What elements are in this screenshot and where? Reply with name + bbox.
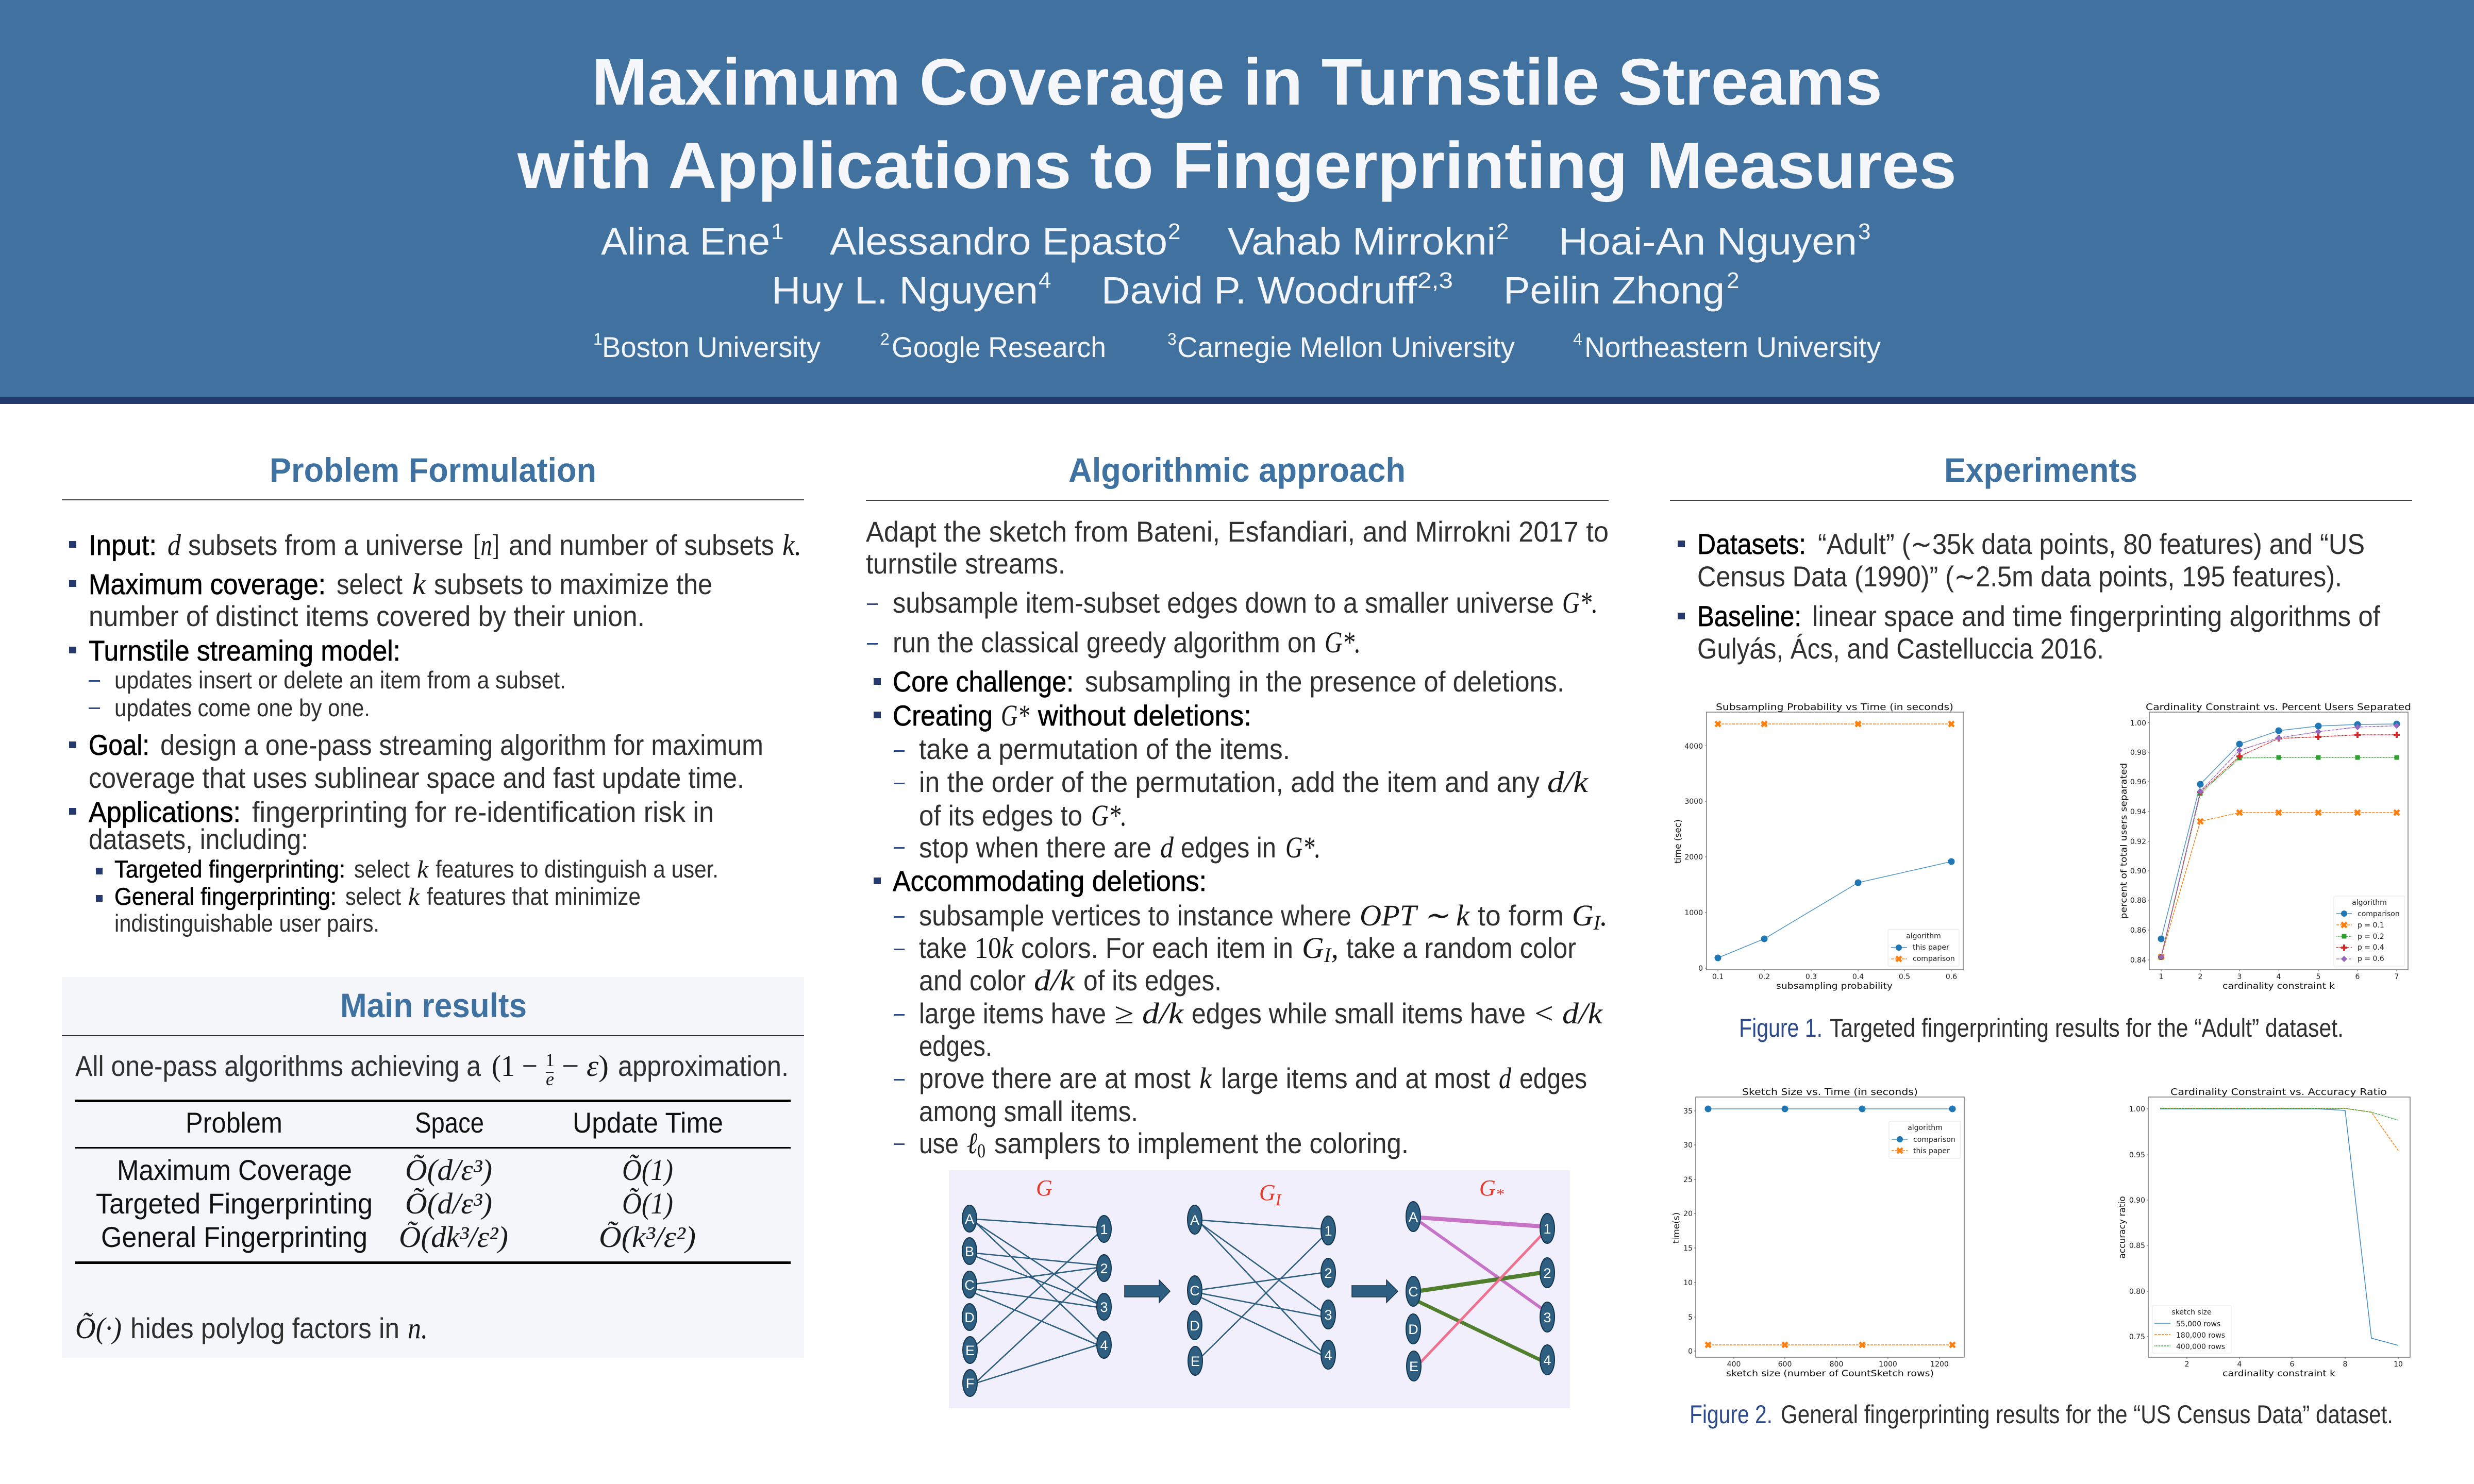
item: accommodating deletions: among small items. bbox=[919, 1095, 1138, 1127]
chart: sketch size vs time: 35 bbox=[1683, 1107, 1693, 1116]
intro text: turnstile streams. bbox=[866, 547, 1065, 580]
item: datasets: “Adult” (∼35k data points, 80 features) and “US bbox=[1818, 528, 2365, 560]
chart: cardinality constraint vs percent users separated: 0.96 bbox=[2130, 778, 2146, 786]
heading: algorithmic approach: Algorithmic approach bbox=[1068, 451, 1406, 489]
chart: sketch size vs time: 1000 bbox=[1879, 1360, 1897, 1369]
results table: Õ(k³/ε²) bbox=[599, 1220, 696, 1254]
graph G: G bbox=[1036, 1175, 1052, 1201]
chart: cardinality constraint vs percent users separated: percent of total users separated bbox=[2119, 763, 2129, 919]
chart: cardinality constraint vs accuracy ratio: 0.75 bbox=[2129, 1333, 2145, 1341]
panel: problem formulation bbox=[62, 451, 804, 937]
item: accommodating deletions: G bbox=[1302, 931, 1324, 965]
authors bbox=[601, 219, 1870, 312]
chart: sketch size vs time: 10 bbox=[1683, 1279, 1693, 1287]
panel: main results bbox=[62, 977, 804, 1358]
graph G: 1 bbox=[1100, 1222, 1108, 1237]
legend bbox=[2152, 1306, 2231, 1353]
legend: p = 0.6 bbox=[2358, 955, 2384, 963]
chart: sketch size vs time: 0 bbox=[1688, 1347, 1693, 1356]
chart: sketch size vs time: 600 bbox=[1778, 1360, 1792, 1369]
item: applications: select bbox=[345, 883, 401, 910]
header banner bbox=[0, 0, 2474, 404]
chart: cardinality constraint vs percent users separated: 0.94 bbox=[2130, 808, 2146, 816]
panel: algorithmic approach bbox=[866, 451, 1609, 1408]
graph G_I: D bbox=[1190, 1318, 1200, 1334]
item: accommodating deletions: to form bbox=[1478, 899, 1564, 932]
results table: General Fingerprinting bbox=[101, 1221, 367, 1253]
authors: 4 bbox=[1039, 268, 1051, 293]
approximation statement: All one-pass algorithms achieving a bbox=[75, 1050, 481, 1082]
item: accommodating deletions: subsample vertices to instance where bbox=[919, 899, 1351, 932]
graph G bbox=[962, 1175, 1111, 1396]
item: baseline: Gulyás, Ács, and Castelluccia 2016. bbox=[1697, 632, 2104, 665]
chart: subsampling probability vs time: 4000 bbox=[1684, 743, 1703, 751]
chart: cardinality constraint vs percent users separated: 0.88 bbox=[2130, 897, 2146, 905]
affiliations: 1 bbox=[593, 330, 603, 348]
item: applications: features to distinguish a user. bbox=[436, 855, 718, 883]
item: baseline: linear space and time fingerprinting algorithms of bbox=[1812, 600, 2380, 632]
item: applications: indistinguishable user pairs. bbox=[114, 909, 379, 937]
chart: cardinality constraint vs accuracy ratio: 0.85 bbox=[2129, 1242, 2145, 1250]
arrow: G_I to G* bbox=[1352, 1280, 1398, 1303]
results table: Update Time bbox=[573, 1106, 723, 1139]
item: core challenge bbox=[874, 665, 1564, 698]
item: core challenge: Core challenge: bbox=[893, 665, 1074, 698]
caption: figure 2: Figure 2. bbox=[1690, 1400, 1773, 1429]
affiliations: 2 bbox=[880, 330, 890, 348]
chart: sketch size vs time: 25 bbox=[1683, 1176, 1693, 1184]
approximation statement: e bbox=[546, 1069, 554, 1089]
graph G*: 3 bbox=[1543, 1310, 1551, 1325]
graph G_I: A bbox=[1190, 1212, 1199, 1228]
graph G: C bbox=[964, 1277, 975, 1293]
chart: subsampling probability vs time: 0 bbox=[1698, 965, 1703, 973]
item: applications: k bbox=[408, 883, 421, 910]
graph G_I: C bbox=[1190, 1283, 1200, 1298]
chart: subsampling probability vs time: 2000 bbox=[1684, 853, 1703, 862]
chart: sketch size vs time: 5 bbox=[1688, 1313, 1693, 1322]
legend: p = 0.4 bbox=[2358, 943, 2384, 952]
chart: cardinality constraint vs percent users separated: 0.84 bbox=[2130, 956, 2146, 965]
authors: 2 bbox=[1727, 268, 1739, 293]
item: datasets: Datasets: bbox=[1697, 528, 1806, 560]
item: maximum coverage: subsets to maximize the bbox=[434, 568, 712, 600]
item: applications: Targeted fingerprinting: bbox=[114, 855, 345, 883]
item: turnstile streaming model: updates come one by one. bbox=[114, 694, 370, 721]
intro steps: G*. bbox=[1325, 626, 1361, 659]
chart: cardinality constraint vs percent users separated: 1.00 bbox=[2130, 719, 2146, 728]
item: accommodating deletions: Accommodating deletions: bbox=[893, 865, 1207, 897]
authors: 2 bbox=[1168, 219, 1180, 244]
item: goal: Goal: bbox=[89, 729, 149, 761]
legend: comparison bbox=[1913, 955, 1955, 963]
item: input bbox=[69, 528, 801, 562]
graph G*: 1 bbox=[1543, 1221, 1551, 1237]
table footnote: Õ(·) bbox=[75, 1311, 122, 1345]
item: applications: fingerprinting for re-identification risk in bbox=[252, 796, 714, 828]
chart: sketch size vs time: 15 bbox=[1683, 1244, 1693, 1253]
item: accommodating deletions: prove there are at most bbox=[919, 1062, 1191, 1094]
item: core challenge: subsampling in the presence of deletions. bbox=[1085, 665, 1564, 698]
item: input: Input: bbox=[89, 529, 157, 561]
legend: algorithm bbox=[2352, 899, 2387, 907]
item: datasets: Census Data (1990)” (∼2.5m data points, 195 features). bbox=[1697, 560, 2342, 593]
caption: figure 1: Figure 1. bbox=[1739, 1014, 1823, 1042]
chart: cardinality constraint vs accuracy ratio: Cardinality Constraint vs. Accuracy Ratio bbox=[2170, 1087, 2387, 1098]
chart: cardinality constraint vs percent users separated: 0.92 bbox=[2130, 838, 2146, 846]
diagram: bipartite graph sketching bbox=[949, 1170, 1570, 1408]
item: maximum coverage bbox=[69, 567, 712, 632]
graph G: B bbox=[965, 1244, 974, 1259]
graph G: E bbox=[965, 1343, 975, 1358]
heading: experiments: Experiments bbox=[1944, 451, 2137, 489]
authors: David P. Woodruff bbox=[1101, 269, 1417, 312]
chart: subsampling probability vs time: 0.3 bbox=[1806, 973, 1817, 981]
chart: sketch size vs time: 400 bbox=[1727, 1360, 1741, 1369]
item: maximum coverage: number of distinct items covered by their union. bbox=[89, 600, 645, 632]
results table: Õ(d/ε³) bbox=[405, 1153, 492, 1187]
graph G*: C bbox=[1408, 1284, 1418, 1300]
item: creating G* without deletions: stop when there are bbox=[919, 831, 1151, 864]
chart: cardinality constraint vs accuracy ratio: 0.80 bbox=[2129, 1288, 2145, 1296]
chart: subsampling probability vs time: 0.4 bbox=[1852, 973, 1864, 981]
chart: cardinality constraint vs accuracy ratio: 1.00 bbox=[2129, 1105, 2145, 1114]
chart: sketch size vs time: 20 bbox=[1683, 1210, 1693, 1218]
chart: cardinality constraint vs accuracy ratio: 10 bbox=[2394, 1360, 2403, 1369]
graph G: 3 bbox=[1100, 1300, 1108, 1315]
chart: sketch size vs time: 1200 bbox=[1930, 1360, 1949, 1369]
item: accommodating deletions bbox=[874, 865, 1608, 1162]
legend: 180,000 rows bbox=[2176, 1331, 2225, 1340]
item: accommodating deletions: use bbox=[919, 1127, 959, 1159]
item: creating G* without deletions bbox=[874, 699, 1589, 864]
chart: subsampling probability vs time bbox=[1673, 702, 1963, 991]
graph G*: A bbox=[1409, 1209, 1418, 1225]
approximation statement bbox=[75, 1049, 789, 1089]
chart: cardinality constraint vs accuracy ratio bbox=[2117, 1087, 2410, 1379]
item: accommodating deletions: large items have bbox=[919, 997, 1106, 1030]
item: maximum coverage: select bbox=[337, 568, 403, 600]
item: input: d bbox=[168, 528, 181, 562]
item: datasets bbox=[1678, 528, 2365, 593]
graph G_I: G bbox=[1259, 1180, 1276, 1205]
item: applications: Applications: bbox=[89, 796, 241, 828]
item: accommodating deletions: d bbox=[1499, 1061, 1512, 1095]
legend bbox=[1889, 1121, 1961, 1158]
approximation statement: 1 bbox=[545, 1050, 555, 1070]
graph G_I: 2 bbox=[1324, 1266, 1332, 1281]
item: accommodating deletions: ≥ bbox=[1114, 997, 1134, 1030]
item: creating G* without deletions: edges in bbox=[1181, 831, 1276, 864]
authors: 1 bbox=[771, 219, 783, 244]
chart: cardinality constraint vs percent users separated: 5 bbox=[2316, 973, 2320, 981]
item: creating G* without deletions: without deletions: bbox=[1038, 699, 1251, 732]
chart: cardinality constraint vs percent users separated: 1 bbox=[2159, 973, 2163, 981]
item: turnstile streaming model: updates insert or delete an item from a subset. bbox=[114, 666, 566, 694]
chart: cardinality constraint vs accuracy ratio: cardinality constraint k bbox=[2222, 1369, 2335, 1379]
chart: subsampling probability vs time: time (sec) bbox=[1673, 819, 1683, 864]
chart: subsampling probability vs time: 3000 bbox=[1684, 798, 1703, 806]
item: applications: k bbox=[417, 856, 429, 883]
graph G*: E bbox=[1409, 1359, 1418, 1374]
intro steps: subsample item-subset edges down to a smaller universe bbox=[893, 586, 1554, 619]
authors: Hoai-An Nguyen bbox=[1559, 220, 1857, 263]
chart: cardinality constraint vs percent users separated: 0.90 bbox=[2130, 867, 2146, 875]
item: turnstile streaming model bbox=[69, 634, 566, 721]
item: accommodating deletions: colors. For each item in bbox=[1021, 932, 1293, 964]
item: input: [n] bbox=[473, 528, 499, 562]
graph G: D bbox=[964, 1310, 975, 1325]
chart: cardinality constraint vs percent users separated: cardinality constraint k bbox=[2222, 981, 2335, 991]
item: goal: coverage that uses sublinear space and fast update time. bbox=[89, 762, 744, 794]
heading: main results: Main results bbox=[340, 986, 527, 1024]
chart: cardinality constraint vs accuracy ratio: 0.90 bbox=[2129, 1196, 2145, 1205]
results table bbox=[75, 1100, 791, 1264]
graph G: 4 bbox=[1100, 1338, 1108, 1353]
item: turnstile streaming model: Turnstile streaming model: bbox=[89, 634, 400, 667]
chart: sketch size vs time: sketch size (number of CountSketch rows) bbox=[1726, 1369, 1934, 1379]
item: accommodating deletions: I bbox=[1593, 911, 1601, 934]
item: accommodating deletions: < bbox=[1534, 997, 1553, 1030]
authors: Vahab Mirrokni bbox=[1228, 220, 1496, 263]
affiliations: Northeastern University bbox=[1584, 331, 1881, 363]
item: accommodating deletions: 10k bbox=[975, 931, 1014, 965]
item: accommodating deletions: edges bbox=[1519, 1062, 1587, 1094]
item: accommodating deletions: and color bbox=[919, 964, 1026, 997]
item: accommodating deletions: d/k bbox=[1034, 964, 1075, 997]
chart: cardinality constraint vs percent users separated: 3 bbox=[2237, 973, 2242, 981]
affiliations: Boston University bbox=[602, 331, 821, 363]
affiliations bbox=[593, 330, 1881, 363]
chart: subsampling probability vs time: Subsampling Probability vs Time (in seconds) bbox=[1716, 702, 1953, 713]
chart: sketch size vs time: time(s) bbox=[1671, 1212, 1682, 1243]
authors: Huy L. Nguyen bbox=[772, 269, 1038, 312]
legend: 400,000 rows bbox=[2176, 1343, 2225, 1351]
authors: Alessandro Epasto bbox=[830, 220, 1167, 263]
intro text bbox=[866, 515, 1609, 580]
graph G*: D bbox=[1408, 1322, 1418, 1337]
title: with Applications to Fingerprinting Measures bbox=[517, 129, 1957, 203]
legend: sketch size bbox=[2171, 1308, 2212, 1317]
legend bbox=[1888, 930, 1959, 966]
item: creating G* without deletions: d/k bbox=[1547, 765, 1589, 799]
item: applications: select bbox=[354, 855, 410, 883]
legend: p = 0.2 bbox=[2358, 933, 2384, 941]
item: baseline bbox=[1678, 600, 2380, 665]
graph G_I bbox=[1188, 1180, 1335, 1375]
item: accommodating deletions: d/k bbox=[1562, 997, 1603, 1030]
approximation statement: approximation. bbox=[618, 1050, 789, 1082]
item: applications: General fingerprinting: bbox=[114, 883, 337, 910]
chart: subsampling probability vs time: subsampling probability bbox=[1776, 981, 1893, 991]
item: goal bbox=[69, 729, 763, 794]
item: input: subsets from a universe bbox=[188, 529, 463, 561]
graph G_I: E bbox=[1191, 1354, 1200, 1369]
item: accommodating deletions: ℓ bbox=[967, 1126, 979, 1160]
item: accommodating deletions: k bbox=[1199, 1061, 1212, 1095]
authors: 2,3 bbox=[1417, 268, 1453, 293]
panel: experiments bbox=[1670, 451, 2412, 1429]
approximation statement: (1 − bbox=[492, 1049, 538, 1083]
legend bbox=[2334, 896, 2404, 966]
chart: cardinality constraint vs accuracy ratio: 6 bbox=[2290, 1360, 2295, 1369]
results table: Maximum Coverage bbox=[117, 1154, 352, 1186]
item: accommodating deletions: , bbox=[1331, 931, 1339, 965]
results table: Problem bbox=[186, 1106, 282, 1139]
item: accommodating deletions: G bbox=[1572, 899, 1594, 932]
graph G: A bbox=[965, 1211, 974, 1227]
item: goal: design a one-pass streaming algorithm for maximum bbox=[160, 729, 763, 761]
item: accommodating deletions: 0 bbox=[977, 1140, 985, 1162]
chart: sketch size vs time bbox=[1671, 1087, 1964, 1379]
chart: sketch size vs time: Sketch Size vs. Time (in seconds) bbox=[1742, 1087, 1918, 1098]
graph G: F bbox=[966, 1376, 974, 1391]
chart: cardinality constraint vs percent users separated: 7 bbox=[2395, 973, 2399, 981]
graph G_I: I bbox=[1275, 1190, 1282, 1209]
graph G*: G bbox=[1479, 1175, 1496, 1201]
affiliations: Carnegie Mellon University bbox=[1177, 331, 1515, 363]
table footnote: hides polylog factors in bbox=[130, 1312, 399, 1344]
authors: Peilin Zhong bbox=[1503, 269, 1725, 312]
results table: Õ(1) bbox=[622, 1153, 673, 1187]
chart: cardinality constraint vs percent users separated: 6 bbox=[2355, 973, 2360, 981]
chart: cardinality constraint vs percent users separated: 2 bbox=[2198, 973, 2202, 981]
chart: subsampling probability vs time: 0.6 bbox=[1946, 973, 1957, 981]
chart: cardinality constraint vs percent users separated: 0.98 bbox=[2130, 749, 2146, 757]
graph G_I: 3 bbox=[1324, 1307, 1332, 1323]
title: Maximum Coverage in Turnstile Streams bbox=[592, 45, 1882, 119]
results table: Õ(d/ε³) bbox=[405, 1187, 492, 1220]
chart: cardinality constraint vs accuracy ratio: accuracy ratio bbox=[2117, 1196, 2128, 1259]
table footnote: n. bbox=[408, 1311, 428, 1345]
item: input: and number of subsets bbox=[509, 529, 774, 561]
results table: Õ(1) bbox=[622, 1187, 673, 1220]
legend: 55,000 rows bbox=[2176, 1320, 2220, 1328]
item: applications bbox=[69, 796, 718, 937]
authors: 2 bbox=[1496, 219, 1509, 244]
item: creating G* without deletions: Creating bbox=[893, 699, 993, 732]
chart: cardinality constraint vs accuracy ratio: 8 bbox=[2343, 1360, 2347, 1369]
item: accommodating deletions: . bbox=[1600, 899, 1608, 932]
item: applications: features that minimize bbox=[427, 883, 641, 910]
results table: Targeted Fingerprinting bbox=[96, 1187, 373, 1220]
chart: cardinality constraint vs percent users separated: Cardinality Constraint vs. Percent Users Separated bbox=[2146, 702, 2411, 713]
item: input: k. bbox=[782, 528, 801, 562]
item: accommodating deletions: take bbox=[919, 932, 967, 964]
item: creating G* without deletions: in the order of the permutation, add the item and any bbox=[919, 766, 1540, 798]
legend: p = 0.1 bbox=[2358, 921, 2384, 930]
chart: cardinality constraint vs percent users separated bbox=[2119, 702, 2411, 991]
item: accommodating deletions: take a random color bbox=[1346, 932, 1576, 964]
item: maximum coverage: k bbox=[412, 567, 426, 601]
item: creating G* without deletions: G* bbox=[1001, 699, 1029, 732]
chart: cardinality constraint vs accuracy ratio: 2 bbox=[2185, 1360, 2189, 1369]
item: accommodating deletions: of its edges. bbox=[1083, 964, 1222, 997]
legend: comparison bbox=[2358, 910, 2400, 918]
authors: Alina Ene bbox=[601, 220, 770, 263]
graph G_I: 1 bbox=[1324, 1223, 1332, 1239]
graph G*: * bbox=[1496, 1185, 1504, 1203]
legend: this paper bbox=[1913, 943, 1949, 952]
item: applications: datasets, including: bbox=[89, 823, 308, 855]
intro steps: run the classical greedy algorithm on bbox=[893, 626, 1316, 659]
chart: subsampling probability vs time: 0.5 bbox=[1899, 973, 1910, 981]
item: accommodating deletions: large items and at most bbox=[1221, 1062, 1490, 1094]
graph G: 2 bbox=[1100, 1261, 1108, 1276]
legend: algorithm bbox=[1906, 932, 1941, 940]
graph G*: 2 bbox=[1543, 1266, 1551, 1281]
graph G* bbox=[1406, 1175, 1554, 1381]
item: accommodating deletions: OPT ∼ k bbox=[1360, 899, 1470, 932]
legend: algorithm bbox=[1908, 1124, 1943, 1132]
intro text: Adapt the sketch from Bateni, Esfandiari, and Mirrokni 2017 to bbox=[866, 515, 1609, 548]
chart: cardinality constraint vs accuracy ratio: 0.95 bbox=[2129, 1151, 2145, 1159]
intro steps: G*. bbox=[1562, 586, 1598, 619]
item: creating G* without deletions: d bbox=[1160, 831, 1174, 864]
chart: cardinality constraint vs percent users separated: 4 bbox=[2277, 973, 2281, 981]
item: accommodating deletions: I bbox=[1324, 943, 1332, 967]
legend: comparison bbox=[1913, 1136, 1955, 1144]
results table: Space bbox=[415, 1106, 484, 1139]
item: creating G* without deletions: of its edges to bbox=[919, 799, 1082, 832]
item: accommodating deletions: d/k bbox=[1142, 997, 1184, 1030]
item: baseline: Baseline: bbox=[1697, 600, 1801, 632]
item: creating G* without deletions: take a permutation of the items. bbox=[919, 733, 1290, 765]
chart: sketch size vs time: 30 bbox=[1683, 1141, 1693, 1150]
affiliations: Google Research bbox=[892, 331, 1106, 363]
affiliations: 4 bbox=[1573, 330, 1582, 348]
chart: sketch size vs time: 800 bbox=[1830, 1360, 1843, 1369]
item: creating G* without deletions: G*. bbox=[1091, 799, 1127, 832]
heading: problem formulation: Problem Formulation bbox=[270, 451, 596, 489]
item: accommodating deletions: edges. bbox=[919, 1030, 992, 1062]
legend: this paper bbox=[1913, 1147, 1950, 1155]
chart: cardinality constraint vs percent users separated: 0.86 bbox=[2130, 926, 2146, 935]
approximation statement: − ε) bbox=[562, 1049, 609, 1083]
caption: figure 1: Targeted fingerprinting results for the “Adult” dataset. bbox=[1830, 1014, 2344, 1042]
arrow: G to G_I bbox=[1125, 1280, 1170, 1303]
item: creating G* without deletions: G*. bbox=[1285, 831, 1320, 864]
chart: subsampling probability vs time: 1000 bbox=[1684, 909, 1703, 917]
affiliations: 3 bbox=[1167, 330, 1177, 348]
intro steps bbox=[867, 586, 1598, 659]
chart: cardinality constraint vs accuracy ratio: 4 bbox=[2237, 1360, 2242, 1369]
authors: 3 bbox=[1858, 219, 1870, 244]
graph G_I: 4 bbox=[1324, 1347, 1332, 1363]
chart: subsampling probability vs time: 0.2 bbox=[1759, 973, 1770, 981]
item: accommodating deletions: samplers to implement the coloring. bbox=[994, 1127, 1409, 1159]
item: accommodating deletions: edges while small items have bbox=[1192, 997, 1526, 1030]
results table: Õ(dk³/ε²) bbox=[399, 1220, 508, 1254]
graph G*: 4 bbox=[1543, 1353, 1551, 1368]
title bbox=[517, 45, 1957, 203]
chart: subsampling probability vs time: 0.1 bbox=[1712, 973, 1724, 981]
item: maximum coverage: Maximum coverage: bbox=[89, 568, 326, 600]
